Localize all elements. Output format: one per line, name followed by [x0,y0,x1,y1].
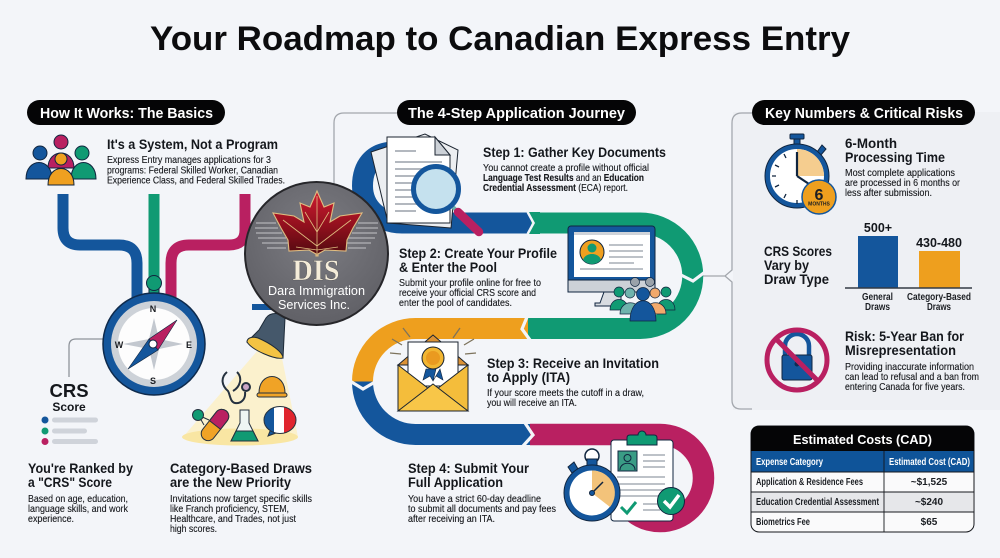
table: estimated costs: Estimated Cost (CAD) [889,457,970,468]
heading: risk: Risk: 5-Year Ban for [845,329,965,344]
icon: flask [231,410,258,441]
text: ranked body [28,494,129,525]
pipes: three programs [63,194,245,300]
text: processing body: are processed in 6 months or [845,178,961,189]
icon: documents and magnifier [371,134,479,232]
table: estimated costs: Expense Category [756,457,823,468]
title: Your Roadmap to Canadian Express Entry [150,20,850,58]
icon: CRS score card: CRS [49,380,89,401]
bar chart: CRS by draw type [845,221,972,313]
heading: step 2: Step 2: Create Your Profile [399,246,557,261]
table: estimated costs: $65 [921,517,938,528]
pill heading: Key Numbers [752,100,975,125]
text: step 3 body: If your score meets the cutoff in a draw, [487,388,644,399]
ribbon: green start notch [529,212,540,234]
text: step 2 body: enter the pool of candidates. [399,298,512,309]
table: estimated costs: Estimated Costs (CAD) [793,432,932,447]
text: risk body: entering Canada for five years. [845,382,965,393]
table: estimated costs [751,426,974,532]
bar chart: CRS by draw type: Category-Based [907,292,971,303]
bar chart: CRS by draw type: 430-480 [916,236,962,250]
bar chart: CRS by draw type: Draws [865,302,890,313]
text: step 3 body [487,388,644,409]
icon: stopwatch 6 months [765,134,836,214]
logo: Dara Immigration Services: Services Inc. [278,298,350,312]
ribbon: chevron gaps [350,212,705,446]
text: risk body: Providing inaccurate information [845,362,974,373]
ribbon: step 2 green [522,223,693,328]
heading: CRS scores vary: Draw Type [764,272,829,287]
text: processing body: Most complete applications [845,168,955,179]
bar chart: CRS by draw type: General [862,292,893,303]
heading: CRS scores vary [764,244,832,287]
heading: ranked: You're Ranked by [28,461,133,476]
icon: maple leaf [273,191,362,256]
heading: CRS scores vary: Vary by [764,258,809,273]
table: estimated costs: ~$240 [915,497,943,508]
heading: processing time: Processing Time [845,150,945,165]
heading: category draws: are the New Priority [170,475,291,490]
icon: banned lock [766,329,828,391]
heading: step 2 [399,246,557,275]
text: category body: Healthcare, and Trades, not just [170,514,296,525]
text: step 4 body: after receiving an ITA. [408,514,495,525]
text: step 4 body: You have a strict 60-day deadline [408,494,541,505]
connector: compass to CRS [69,339,104,377]
ribbon: step 4 crimson [530,434,703,522]
text: system body [107,155,285,186]
pill heading: How It Works [27,100,225,125]
table: estimated costs: ~$1,525 [911,477,948,488]
heading: step 3: to Apply (ITA) [487,370,570,385]
heading: step 4: Step 4: Submit Your [408,461,530,476]
icon: French speech bubble [264,406,296,436]
text: step 3 body: you will receive an ITA. [487,398,577,409]
icon: compass: W [115,340,124,350]
icon: compass: E [186,340,192,350]
icon: stopwatch 6 months: MONTHS [808,202,830,208]
text: category body: like Franch proficiency, STEM, [170,504,289,515]
icon: people group [26,135,96,185]
heading: processing time: 6-Month [845,136,897,151]
logo: Dara Immigration Services: DIS [292,254,340,287]
heading: ranked: a "CRS" Score [28,475,112,490]
heading: risk [845,329,965,358]
text: step 2 body: Submit your profile online for free to [399,278,541,289]
text: step 1 body: Credential Assessment (ECA) report. [483,183,628,194]
logo: Dara Immigration Services [245,182,388,325]
connector: section 2 to logo [334,113,397,186]
text: ranked body: Based on age, education, [28,494,128,505]
text: step 1 body: You cannot create a profile without official [483,163,649,174]
icon: stethoscope [223,372,250,403]
bar chart: CRS by draw type: Draws [927,302,951,313]
text: step 2 body [399,278,541,309]
icon: envelope invitation [390,328,476,411]
table: estimated costs: Biometrics Fee [756,517,810,528]
heading: step 2: & Enter the Pool [399,260,497,275]
icon: CRS score card: Score [52,400,86,414]
panel: key numbers [764,134,979,393]
text: category body: Invitations now target specific skills [170,494,312,505]
heading: risk: Misrepresentation [845,343,956,358]
heading: step 3 [487,356,659,385]
icon: molecule and pill [192,407,232,443]
table: estimated costs: Application & Residence Fees [756,477,863,488]
ribbon: step 1 blue [362,152,535,223]
heading: step 4 [408,461,530,490]
text: category body [170,494,312,535]
text: step 2 body: receive your official CRS score and [399,288,536,299]
heading: category draws [170,461,312,490]
text: ranked body: experience. [28,514,74,525]
ribbon: step 3 orange [362,328,528,382]
text: system body: Express Entry manages applications for 3 [107,155,271,166]
pill heading: 4-Step Journey: The 4-Step Application Journey [408,105,626,122]
text: processing body [845,168,961,199]
text: ranked body: language skills, and work [28,504,129,515]
text: system body: programs: Federal Skilled Worker, Canadian [107,166,278,176]
connector: section 3 bracket [703,113,752,409]
heading: system: It's a System, Not a Program [107,137,278,152]
icon: spotlight [182,304,298,446]
heading: processing time [845,136,945,165]
text: risk body: can lead to refusal and a ban from [845,372,979,383]
heading: step 1: Step 1: Gather Key Documents [483,145,666,160]
icon: monitor and candidates [568,226,675,321]
text: risk body [845,362,979,393]
ribbon: step 4 blue lower [362,382,534,434]
text: step 4 body [408,494,556,525]
text: step 1 body: Language Test Results and an Education [483,173,644,184]
logo: Dara Immigration Services: Dara Immigration [268,284,365,298]
text: step 1 body [483,163,649,194]
icon: hard hat [257,376,287,397]
icon: compass: S [150,376,156,386]
heading: step 3: Step 3: Receive an Invitation [487,356,659,371]
heading: ranked [28,461,133,490]
pill heading: Key Numbers: Key Numbers & Critical Risks [765,105,963,122]
text: processing body: less after submission. [845,188,932,199]
text: category body: high scores. [170,524,217,535]
text: system body: Experience Class, and Federal Skilled Trades. [107,176,285,186]
bar chart: CRS by draw type: 500+ [864,221,892,235]
pill heading: 4-Step Journey [397,100,636,125]
icon: clipboard and stopwatch [564,431,684,521]
heading: step 4: Full Application [408,475,503,490]
heading: category draws: Category-Based Draws [170,461,312,476]
panel: journey ribbon [350,134,705,525]
table: estimated costs: Education Credential Assessment [756,497,880,508]
icon: CRS score card [42,380,98,445]
heading: CRS scores vary: CRS Scores [764,244,832,259]
icon: compass: N [150,304,156,314]
text: step 4 body: to submit all documents and pay fees [408,504,556,515]
panel: how it works [26,135,312,535]
pill heading: How It Works: How It Works: The Basics [40,105,213,122]
icon: compass [103,276,205,395]
icon: stopwatch 6 months: 6 [815,187,824,204]
